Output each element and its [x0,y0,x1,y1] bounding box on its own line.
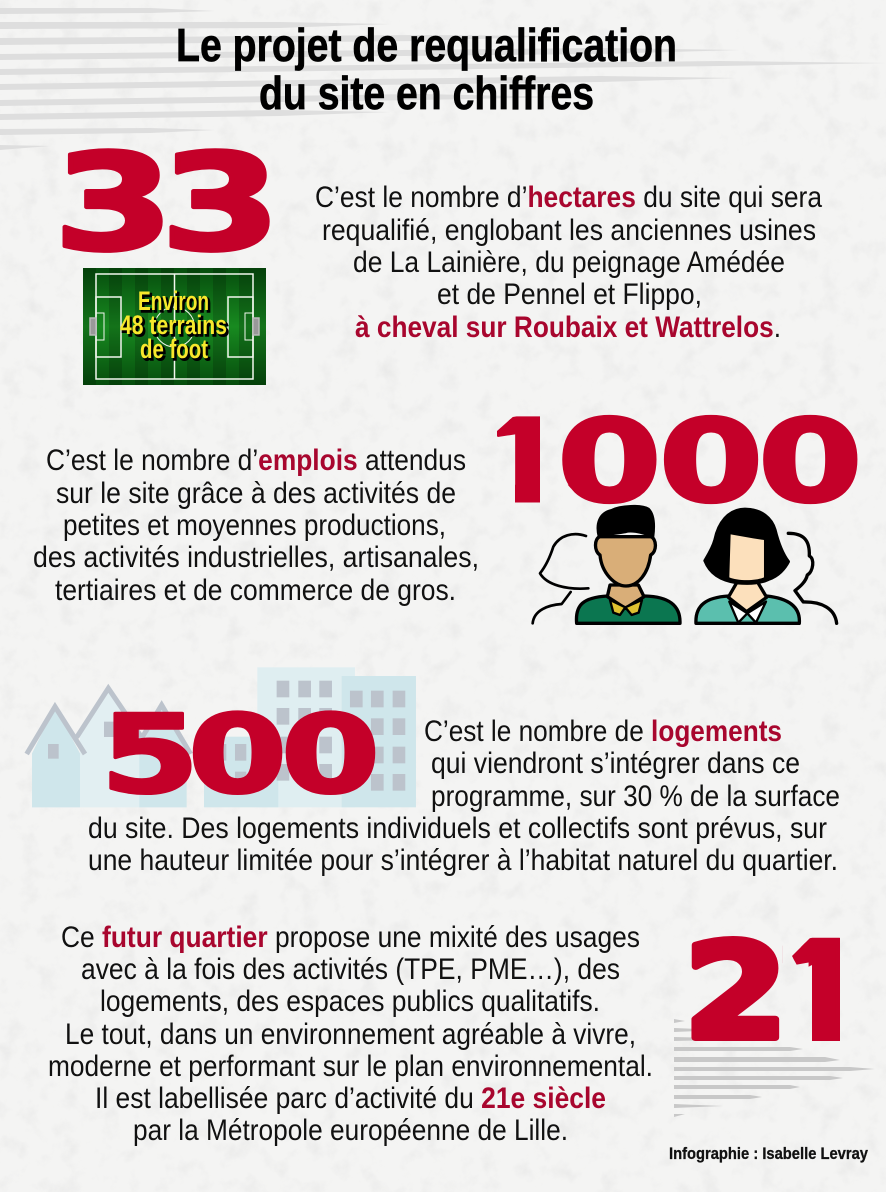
text block: emplois: C’est le nombre d’emplois attendus [46,444,466,477]
text block: futur quartier: Le tout, dans un environnement agréable à vivre, [65,1018,636,1051]
pitch caption: Environ [140,288,211,318]
text block: emplois: petites et moyennes productions, [63,509,446,542]
big number: 21: 21 [684,916,875,1069]
text block: hectares: requalifié, englobant les anciennes usines [322,214,816,247]
title [176,19,677,119]
text block: emplois: des activités industrielles, artisanales, [33,541,479,574]
pitch caption: 48 terrains [122,312,229,342]
text block: logements: C’est le nombre de logements [424,715,782,748]
text block: hectares: C’est le nombre d’hectares du site qui sera [315,181,822,214]
illustration: houses and buildings [27,667,416,807]
big number: 1000: 1000 [475,396,863,528]
text block: futur quartier: par la Métropole européenne de Lille. [133,1114,568,1147]
pitch caption: de foot [142,336,210,366]
text block: hectares: et de Pennel et Flippo, [437,278,702,311]
title: du site en chiffres [259,67,594,119]
text block: logements: programme, sur 30 % de la surface [431,780,840,813]
pitch caption: Environ [138,286,209,316]
text block: logements: qui viendront s’intégrer dans ce [431,747,800,780]
man [576,507,680,623]
big number: 33: 33 [54,127,281,281]
text block: futur quartier: avec à la fois des activités (TPE, PME…), des [81,953,620,986]
big number: 500: 500 [100,692,380,818]
text block: futur quartier: moderne et performant sur le plan environnemental. [48,1050,653,1083]
text block: emplois: sur le site grâce à des activités de [56,477,456,510]
text block: emplois [33,444,479,607]
text block: hectares: de La Lainière, du peignage Amédée [353,246,785,279]
text block: futur quartier: Ce futur quartier propose une mixité des usages [61,921,640,954]
text block: futur quartier [48,921,653,1147]
text block: futur quartier: logements, des espaces publics qualitatifs. [100,985,600,1018]
title: Le projet de requalification [176,19,677,71]
text block: futur quartier: Il est labellisée parc d’activité du 21e siècle [95,1082,606,1115]
back person right [788,533,837,623]
text block: hectares: à cheval sur Roubaix et Wattrelos. [355,311,781,344]
woman [696,509,799,623]
pitch caption: 48 terrains [120,310,227,340]
pitch caption: de foot [140,334,208,364]
back person left [533,534,588,623]
text block: logements [88,715,840,877]
text block: emplois: tertiaires et de commerce de gros. [55,574,456,607]
football pitch illustration [83,268,266,385]
icon: group of people [533,507,837,623]
text block: hectares [315,181,822,344]
pitch caption [120,286,229,366]
